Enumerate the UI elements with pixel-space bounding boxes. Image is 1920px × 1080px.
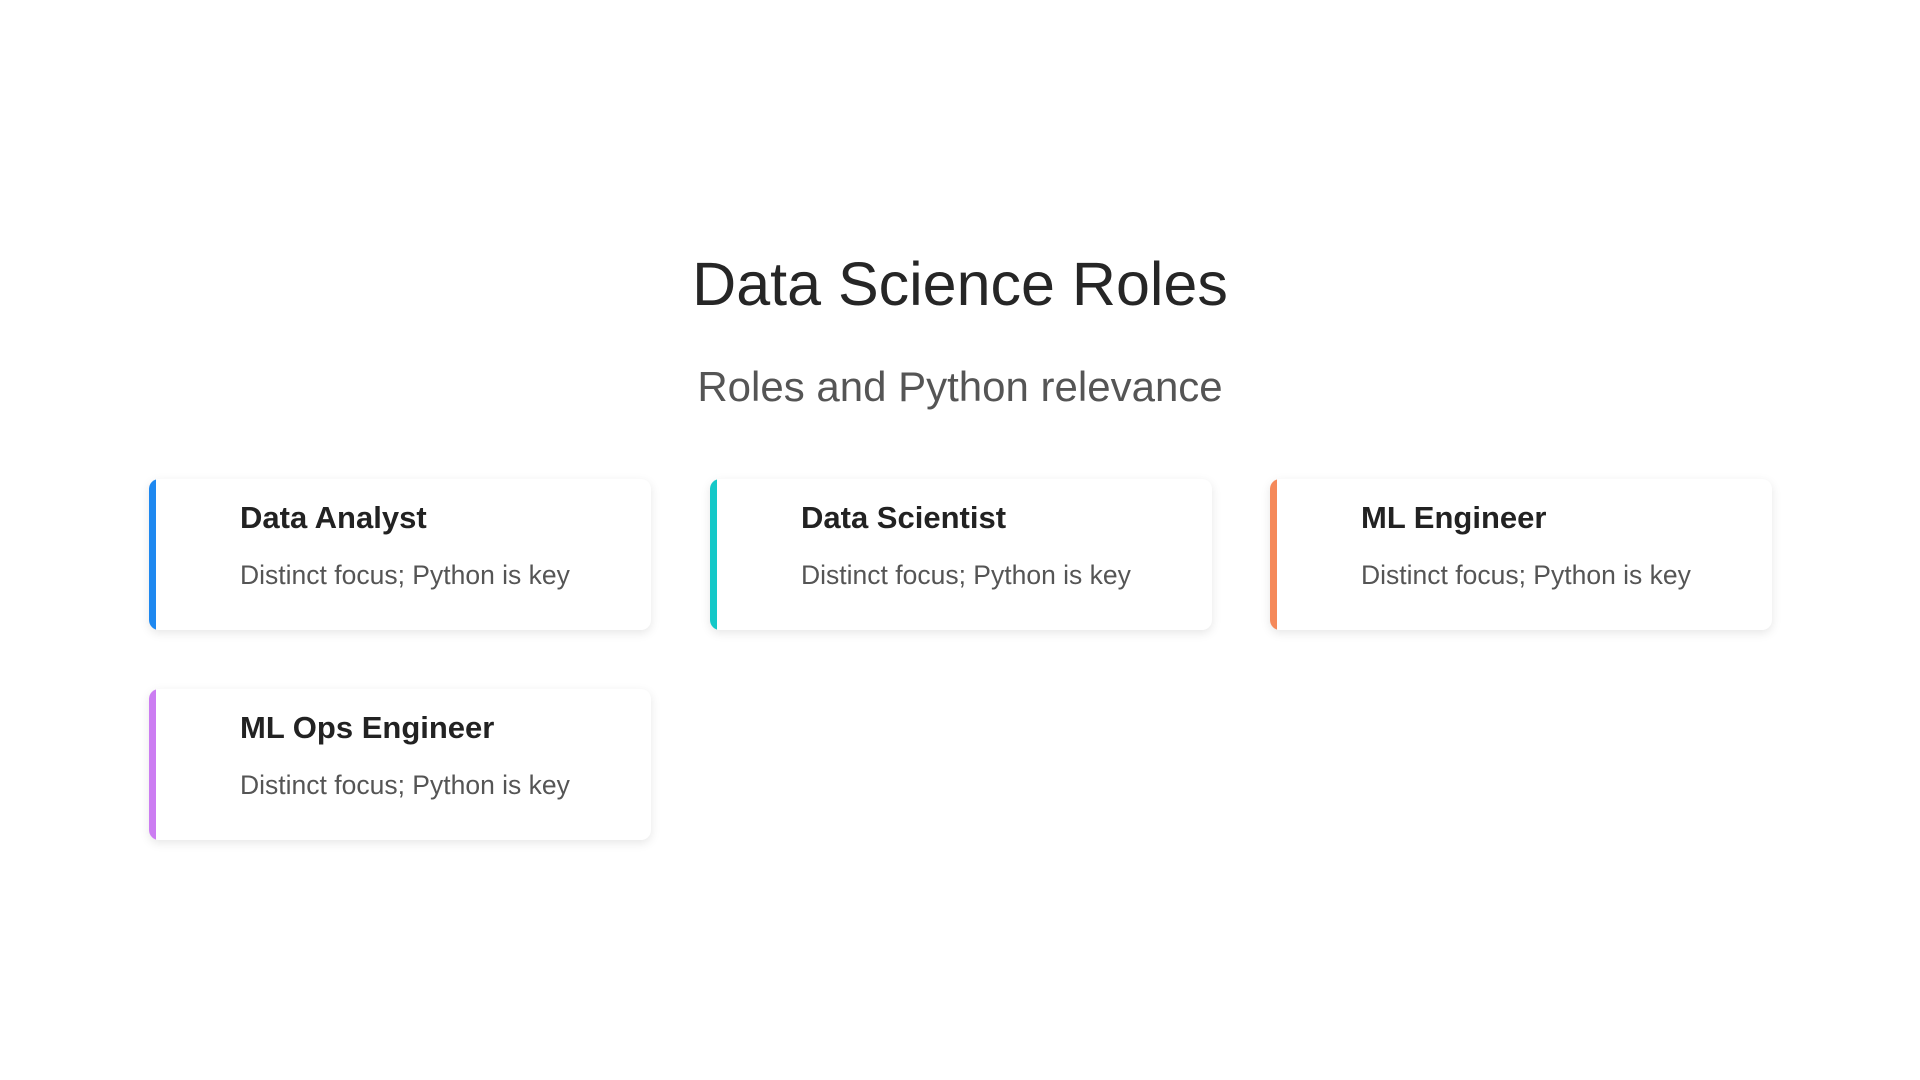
card: Data Analyst: Data Analyst: [240, 500, 427, 535]
card: ML Ops Engineer: Distinct focus; Python is key: [240, 770, 570, 800]
card: ML Engineer: [1270, 479, 1772, 630]
card: ML Ops Engineer: ML Ops Engineer: [240, 710, 494, 745]
card: ML Engineer: ML Engineer: [1361, 500, 1546, 535]
title: Data Science Roles: [692, 250, 1228, 318]
card: Data Scientist: Data Scientist: [801, 500, 1006, 535]
card: ML Ops Engineer: [149, 689, 651, 840]
card: Data Scientist: [710, 479, 1212, 630]
subtitle: Roles and Python relevance: [697, 363, 1223, 410]
card: Data Scientist: Distinct focus; Python is key: [801, 560, 1131, 590]
card: Data Analyst: Distinct focus; Python is key: [240, 560, 570, 590]
card: Data Analyst: [149, 479, 651, 630]
card: ML Engineer: Distinct focus; Python is key: [1361, 560, 1691, 590]
